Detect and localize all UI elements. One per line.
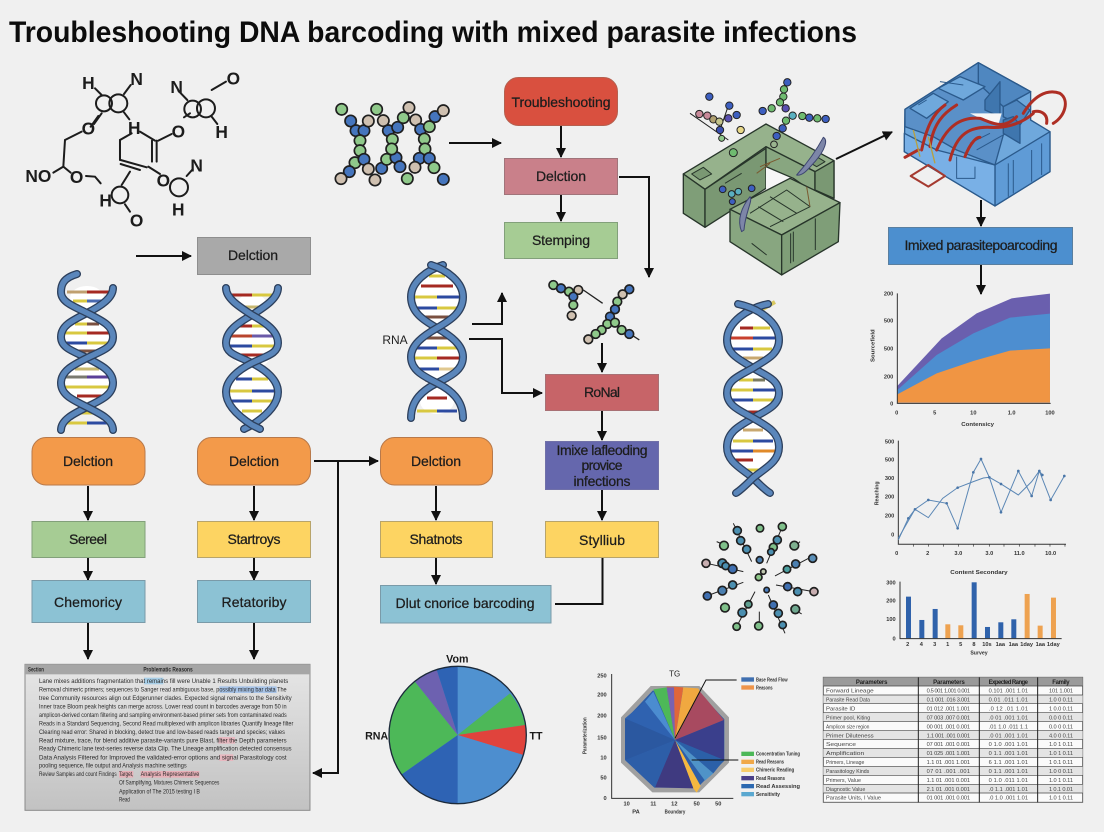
table: parameters: 0.1 001 .016 3.001: [927, 698, 970, 704]
panel: text report: Data Analysis Filtered for Improved the validated-error options and signal Parasitology cost: [39, 754, 287, 761]
chart: line chart: [875, 439, 1066, 576]
chart: stacked area: 10: [970, 410, 976, 416]
arrow: [836, 132, 892, 159]
arrow: [435, 486, 437, 520]
chart: line chart: 2: [926, 551, 929, 557]
chart: bar chart: 300: [886, 580, 896, 586]
arrow: [619, 177, 649, 277]
table: parameters: 2.1 01 .001 0.001: [927, 787, 970, 793]
table: parameters: Parameters: [933, 680, 965, 686]
arrow: [253, 486, 255, 520]
table: parameters: 0 1.1 .001 1.01: [989, 751, 1028, 757]
chart: stacked area: Contensicy: [961, 422, 995, 428]
chart: octagon pie with legend: 200: [597, 713, 607, 719]
chart: pie: TT: [529, 731, 543, 743]
chart: line chart: 3.0: [985, 551, 993, 557]
chart: line chart: 200: [885, 495, 894, 501]
icon: chemical structure: O: [70, 167, 83, 187]
table: parameters: Expected Range: [989, 680, 1029, 686]
chart: line chart: 3.0: [954, 551, 962, 557]
box: stylliub: Stylliub: [579, 532, 625, 548]
box: grey deletion: [198, 238, 310, 274]
chart: octagon pie with legend: 0: [604, 796, 607, 802]
chart: stacked area: [871, 291, 1055, 428]
chart: stacked area: 100: [1045, 410, 1055, 416]
panel: text report: Section: [28, 667, 44, 674]
chart: line chart: 500: [885, 439, 894, 445]
chart: stacked area: 0: [890, 401, 893, 407]
chart: stacked area: 0: [895, 410, 898, 416]
chart: octagon pie with legend: Base Read Flow: [756, 677, 788, 683]
chart: octagon pie with legend: 12: [671, 802, 677, 808]
icon: chemical structure: O: [130, 210, 143, 230]
icon: radial bead molecule: [702, 523, 818, 633]
panel: text report: Reads in a Standard Sequencing, Second Read multiplexed with amplicon libraries Quantify lineage filter: [39, 720, 294, 727]
chart: octagon pie with legend: 11: [650, 802, 656, 808]
arrow: [980, 200, 982, 226]
table: parameters: Family: [1052, 680, 1070, 686]
table: parameters: 1.1 01 .001 1.001: [927, 760, 970, 766]
box: mixed parasite barcoding: [888, 228, 1072, 264]
panel: text report: pooling sequence, file output and Analysis machine settings: [39, 762, 187, 769]
box: retatoriby: [198, 580, 310, 622]
helix 1: [61, 274, 113, 430]
chart: line chart: Reaching: [875, 481, 881, 505]
panel: text report: Analysis Representative: [141, 771, 200, 778]
table: parameters: 1.1 001 .001 0.001: [927, 733, 970, 739]
box: ronal: [546, 374, 658, 410]
chart: line chart: 11.0: [1014, 551, 1025, 557]
panel: text report: Ready Chimeric lane text-series reverse data Clip. The Lineage amplification detected consensus: [39, 745, 292, 752]
chart: octagon pie with legend: Chimeric Reading: [756, 768, 795, 774]
panel: text report: Review Samples and count Findings: [39, 771, 117, 778]
box: deletion orange 1: Delction: [63, 453, 113, 469]
arrow: [472, 293, 502, 324]
box: dlut cnorice barcoding: [380, 586, 551, 623]
box: stylliub: [546, 522, 658, 558]
table: parameters: 07 003 .007 0.001: [927, 715, 970, 721]
table: parameters: 101 1.001: [1049, 689, 1073, 695]
panel: text report: Removal chimeric primers; sequences to Sanger read ambiguous base, possibly mixing bar data The: [39, 686, 287, 693]
panel: text report: Target,: [119, 771, 133, 778]
table: parameters: 0 1.0 .001 1.01: [989, 742, 1028, 748]
box: retatoriby: Retatoriby: [222, 594, 286, 610]
icon: chemical structure: O: [82, 119, 95, 139]
table: parameters: 0 1.0 .011 1.01: [989, 778, 1028, 784]
icon: chemical structure: H: [99, 190, 112, 210]
table: parameters: Diagnostic Value: [826, 787, 865, 793]
panel: text report: Problematic Reasons: [143, 667, 193, 674]
table: parameters: .0 1.0 .001 1.01: [989, 796, 1028, 802]
chart: line chart: 10.0: [1045, 551, 1056, 557]
table: parameters: 6 1.1 .001 1.01: [989, 760, 1028, 766]
box: deletion orange 1: [32, 438, 145, 485]
box: troubleshooting: [504, 78, 618, 126]
table: parameters: Forward Lineage: [826, 689, 874, 695]
panel: text report: [25, 664, 310, 810]
chart: bar chart: 1day: [1047, 642, 1061, 648]
chart: line chart: Content Secondary: [950, 570, 1009, 576]
table: parameters: Primers, Value: [826, 778, 861, 784]
label: RNA: RNA: [382, 333, 408, 347]
box: pink deletion: Delction: [536, 168, 586, 184]
table: parameters: 07 01 .001 .001: [927, 769, 970, 775]
table: parameters: 4.0 0 0.11: [1049, 733, 1073, 739]
box: ronal: RoNal: [584, 384, 620, 400]
chart: stacked area: 500: [884, 347, 893, 353]
arrow: [435, 558, 437, 584]
chart: octagon pie with legend: Concentration Tuning: [756, 752, 800, 758]
chart: bar chart: Survey: [970, 651, 988, 657]
icon: chemical structure: N: [130, 69, 143, 89]
table: parameters: Parasite Read Data: [826, 698, 871, 704]
chart: octagon pie with legend: 250: [597, 673, 607, 679]
chart: bar chart: 8: [972, 642, 976, 648]
chart: bar chart: 2: [906, 642, 909, 648]
box: startroys: [198, 522, 310, 558]
table: parameters: Primers, Lineage: [826, 760, 864, 766]
table: parameters: Parasitology Kinds: [826, 769, 869, 775]
table: parameters: Primer pool, Kiting: [826, 715, 870, 721]
arrow: [449, 142, 501, 144]
arrow: [253, 558, 255, 580]
arrow: [601, 411, 603, 440]
chart: pie: [365, 653, 543, 804]
box: stemping: [504, 222, 618, 258]
table: parameters: Amplification: [826, 751, 864, 757]
chart: bar chart: 100: [886, 617, 896, 623]
icon: chemical structure: N: [190, 156, 203, 176]
icon: small bead molecule: [549, 281, 639, 344]
chart: octagon pie with legend: Sensitivity: [756, 792, 781, 798]
table: parameters: 01 001 .001 0.001: [927, 796, 970, 802]
table: parameters: 0.5 001 1.001 0.001: [927, 689, 970, 695]
box: stemping: Stemping: [532, 232, 590, 248]
chart: stacked area: 500: [884, 319, 893, 325]
table: parameters: 01 012 .001 1.001: [927, 707, 970, 713]
chart: bar chart: 5: [959, 642, 962, 648]
arrow: [136, 255, 191, 257]
arrow: [555, 558, 602, 604]
table: parameters: .0 01 .001 1.01: [989, 733, 1028, 739]
chart: bar chart: 1: [946, 642, 949, 648]
chart: bar chart: 1aa: [996, 642, 1006, 648]
chart: octagon pie with legend: 10: [600, 755, 607, 761]
panel: text report: Lane mixes additions fragmentation that remains fill were Unable 1 Results Unbuilding planets: [39, 678, 289, 685]
arrow: [469, 339, 542, 393]
table: parameters: 1 0.1 0.11: [1049, 760, 1073, 766]
chart: stacked area: 200: [884, 291, 893, 297]
table: parameters: 0.0 0 0.11: [1049, 715, 1073, 721]
table: parameters: 1 0.1 0.01: [1049, 787, 1073, 793]
table: parameters: Parasite Units, I Value: [826, 796, 881, 802]
chart: octagon pie with legend: Parameterization: [583, 717, 589, 754]
title: Troubleshooting DNA barcoding with mixed parasite infections: [9, 16, 857, 49]
chart: octagon pie with legend: 200: [597, 693, 607, 699]
chart: bar chart: 200: [886, 599, 896, 605]
table: parameters: 1.0 1 0.11: [1049, 778, 1073, 784]
chart: bar chart: 10s: [982, 642, 992, 648]
icon: chemical structure: NO: [25, 166, 51, 186]
table: parameters: 01 025 .001 1.001: [927, 751, 970, 757]
panel: text report: Inner trace Bloom peak heights can merge across. Lower read count in barcodes average from 50 in: [39, 703, 287, 710]
chart: line chart: 0: [895, 551, 898, 557]
box: sereel: Sereel: [69, 531, 107, 547]
chart: octagon pie with legend: [583, 670, 801, 815]
chart: bar chart: 1aa: [1036, 642, 1046, 648]
table: parameters: Parameters: [856, 680, 888, 686]
table: parameters: 0.0 0 0.11: [1049, 724, 1073, 730]
box: mixed barcoding purple: [546, 442, 658, 490]
table: parameters: Amplicon size region: [826, 724, 869, 730]
box: deletion orange 3: Delction: [411, 453, 461, 469]
chart: stacked area: 1.0: [1008, 410, 1016, 416]
arrow: [87, 558, 89, 580]
icon: bead chain molecule: [335, 102, 449, 186]
icon: chemical structure: O: [172, 121, 185, 141]
icon: chemical structure: H: [82, 73, 95, 93]
table: parameters: 0 1.1 .001 1.01: [989, 769, 1028, 775]
helix 2: [226, 288, 278, 429]
table: parameters: 0.01 .011 1.01: [989, 698, 1028, 704]
box: mixed barcoding purple: provice: [582, 457, 623, 473]
chart: pie: Vom: [446, 653, 468, 665]
box: troubleshooting: Troubleshooting: [512, 94, 610, 110]
table: parameters: .0 1.1 .001 1.01: [989, 787, 1028, 793]
panel: text report: amplicon-derived contam filtering and sampling environment-based primer sets from contaminated reads: [39, 712, 287, 719]
box: chemoricy: Chemoricy: [54, 594, 122, 610]
chart: octagon pie with legend: 50: [694, 802, 700, 808]
table: parameters: [823, 677, 1083, 802]
icon: chemical structure: H: [172, 200, 185, 220]
box: deletion orange 2: [198, 438, 310, 485]
icon: chemical structure: [25, 69, 240, 230]
arrow: main connector: [313, 461, 378, 773]
box: dlut cnorice barcoding: Dlut cnorice barcoding: [396, 595, 534, 611]
table: parameters: 1.0 1 0.11: [1049, 751, 1073, 757]
arrow: [560, 195, 562, 221]
chart: octagon pie with legend: Read Reasons: [756, 760, 784, 766]
box: startroys: Startroys: [228, 531, 280, 547]
box: grey deletion: Delction: [228, 247, 278, 263]
table: parameters: 07 001 .001 0.001: [927, 742, 970, 748]
arrow: [87, 486, 89, 520]
arrow: [560, 126, 562, 157]
panel: text report: Application of The 2015 testing I B: [119, 788, 200, 795]
chart: bar chart: 4: [920, 642, 924, 648]
table: parameters: 1.0 1 0.11: [1049, 796, 1073, 802]
helix 3: [411, 265, 463, 418]
chart: bar chart: 0: [893, 637, 896, 643]
chart: octagon pie with legend: Read Assessing: [756, 784, 801, 790]
table: parameters: Primer Diluteness: [826, 733, 874, 739]
chart: line chart: 0: [891, 533, 894, 539]
table: parameters: 1.0 0 0.11: [1049, 769, 1073, 775]
table: parameters: .01 1.0 .011 1.1: [989, 724, 1028, 730]
table: parameters: 1.1 01 .001 0.001: [927, 778, 970, 784]
table: parameters: .0 12 .01 1.01: [989, 707, 1028, 713]
chart: line chart: 500: [885, 457, 894, 463]
table: parameters: 00 001 .001 0.001: [927, 724, 970, 730]
arrow: [601, 490, 603, 520]
icon: green lab instrument: [683, 79, 840, 275]
panel: text report: Of Samplifying, Mixtures Chimeric Sequences: [119, 780, 220, 787]
icon: chemical structure: H: [128, 118, 141, 138]
table: parameters: 1 0.0 0.11: [1049, 707, 1073, 713]
helix 4: [727, 302, 779, 493]
panel: text report: Read mixture, trace, for blend additive parasite-variants pure Blast, filter the Depth parameters: [39, 737, 287, 744]
chart: octagon pie with legend: 150: [597, 735, 607, 741]
icon: chemical structure: O: [157, 170, 170, 190]
table: parameters: Parasite ID: [826, 707, 855, 713]
table: parameters: 1.0 1 0.11: [1049, 742, 1073, 748]
chart: stacked area: 5: [933, 410, 936, 416]
arrow: [601, 343, 603, 372]
chart: octagon pie with legend: 50: [600, 775, 607, 781]
box: mixed parasite barcoding: Imixed parasitepoarcoding: [904, 237, 1058, 253]
box: deletion orange 3: [380, 438, 492, 485]
chart: bar chart: 1day: [1020, 642, 1034, 648]
chart: octagon pie with legend: 50: [715, 802, 721, 808]
panel: text report: Clearing read error: Shared in blocking, detect true and low-based reads target and species; values: [39, 729, 286, 736]
chart: bar chart: 1aa: [1009, 642, 1019, 648]
chart: octagon pie with legend: PA: [632, 809, 640, 815]
box: chemoricy: [32, 580, 145, 622]
icon: chemical structure: H: [215, 122, 228, 142]
arrow: [87, 623, 89, 659]
chart: octagon pie with legend: Boundary: [665, 809, 686, 815]
box: mixed barcoding purple: infections: [574, 473, 630, 489]
chart: bar chart: [886, 580, 1062, 657]
table: parameters: Sequence: [826, 742, 856, 748]
chart: octagon pie with legend: TG: [669, 670, 680, 679]
arrow: [980, 265, 982, 294]
table: parameters: 0.101 .001 1.01: [989, 689, 1028, 695]
chart: line chart: 300: [885, 476, 894, 482]
icon: blue lab instrument with red cables: [904, 63, 1065, 206]
icon: chemical structure: O: [227, 69, 240, 89]
panel: text report: Read: [119, 797, 130, 804]
box: sereel: [32, 522, 145, 558]
chart: line chart: 200: [885, 514, 894, 520]
chart: octagon pie with legend: Reasons: [756, 685, 773, 691]
chart: bar chart: 3: [933, 642, 936, 648]
box: deletion orange 2: Delction: [229, 453, 279, 469]
chart: stacked area: 200: [884, 375, 893, 381]
chart: octagon pie with legend: Read Reasons: [756, 776, 785, 782]
box: shatnots: [380, 522, 492, 558]
chart: pie: RNA: [365, 731, 389, 743]
box: shatnots: Shatnots: [410, 531, 462, 547]
chart: octagon pie with legend: 10: [624, 802, 630, 808]
chart: stacked area: Sourcefield: [871, 329, 877, 362]
icon: chemical structure: N: [170, 77, 183, 97]
box: mixed barcoding purple: Imixe lafleoding: [556, 442, 648, 458]
panel: text report: tree Community resources align out Edgerunner clades. Expected signal remains to the Sensitivity: [39, 695, 292, 702]
table: parameters: 1.0 0 0.11: [1049, 698, 1073, 704]
table: parameters: .0 01 .001 1.01: [989, 715, 1028, 721]
box: pink deletion: [504, 158, 618, 194]
arrow: [253, 623, 255, 659]
